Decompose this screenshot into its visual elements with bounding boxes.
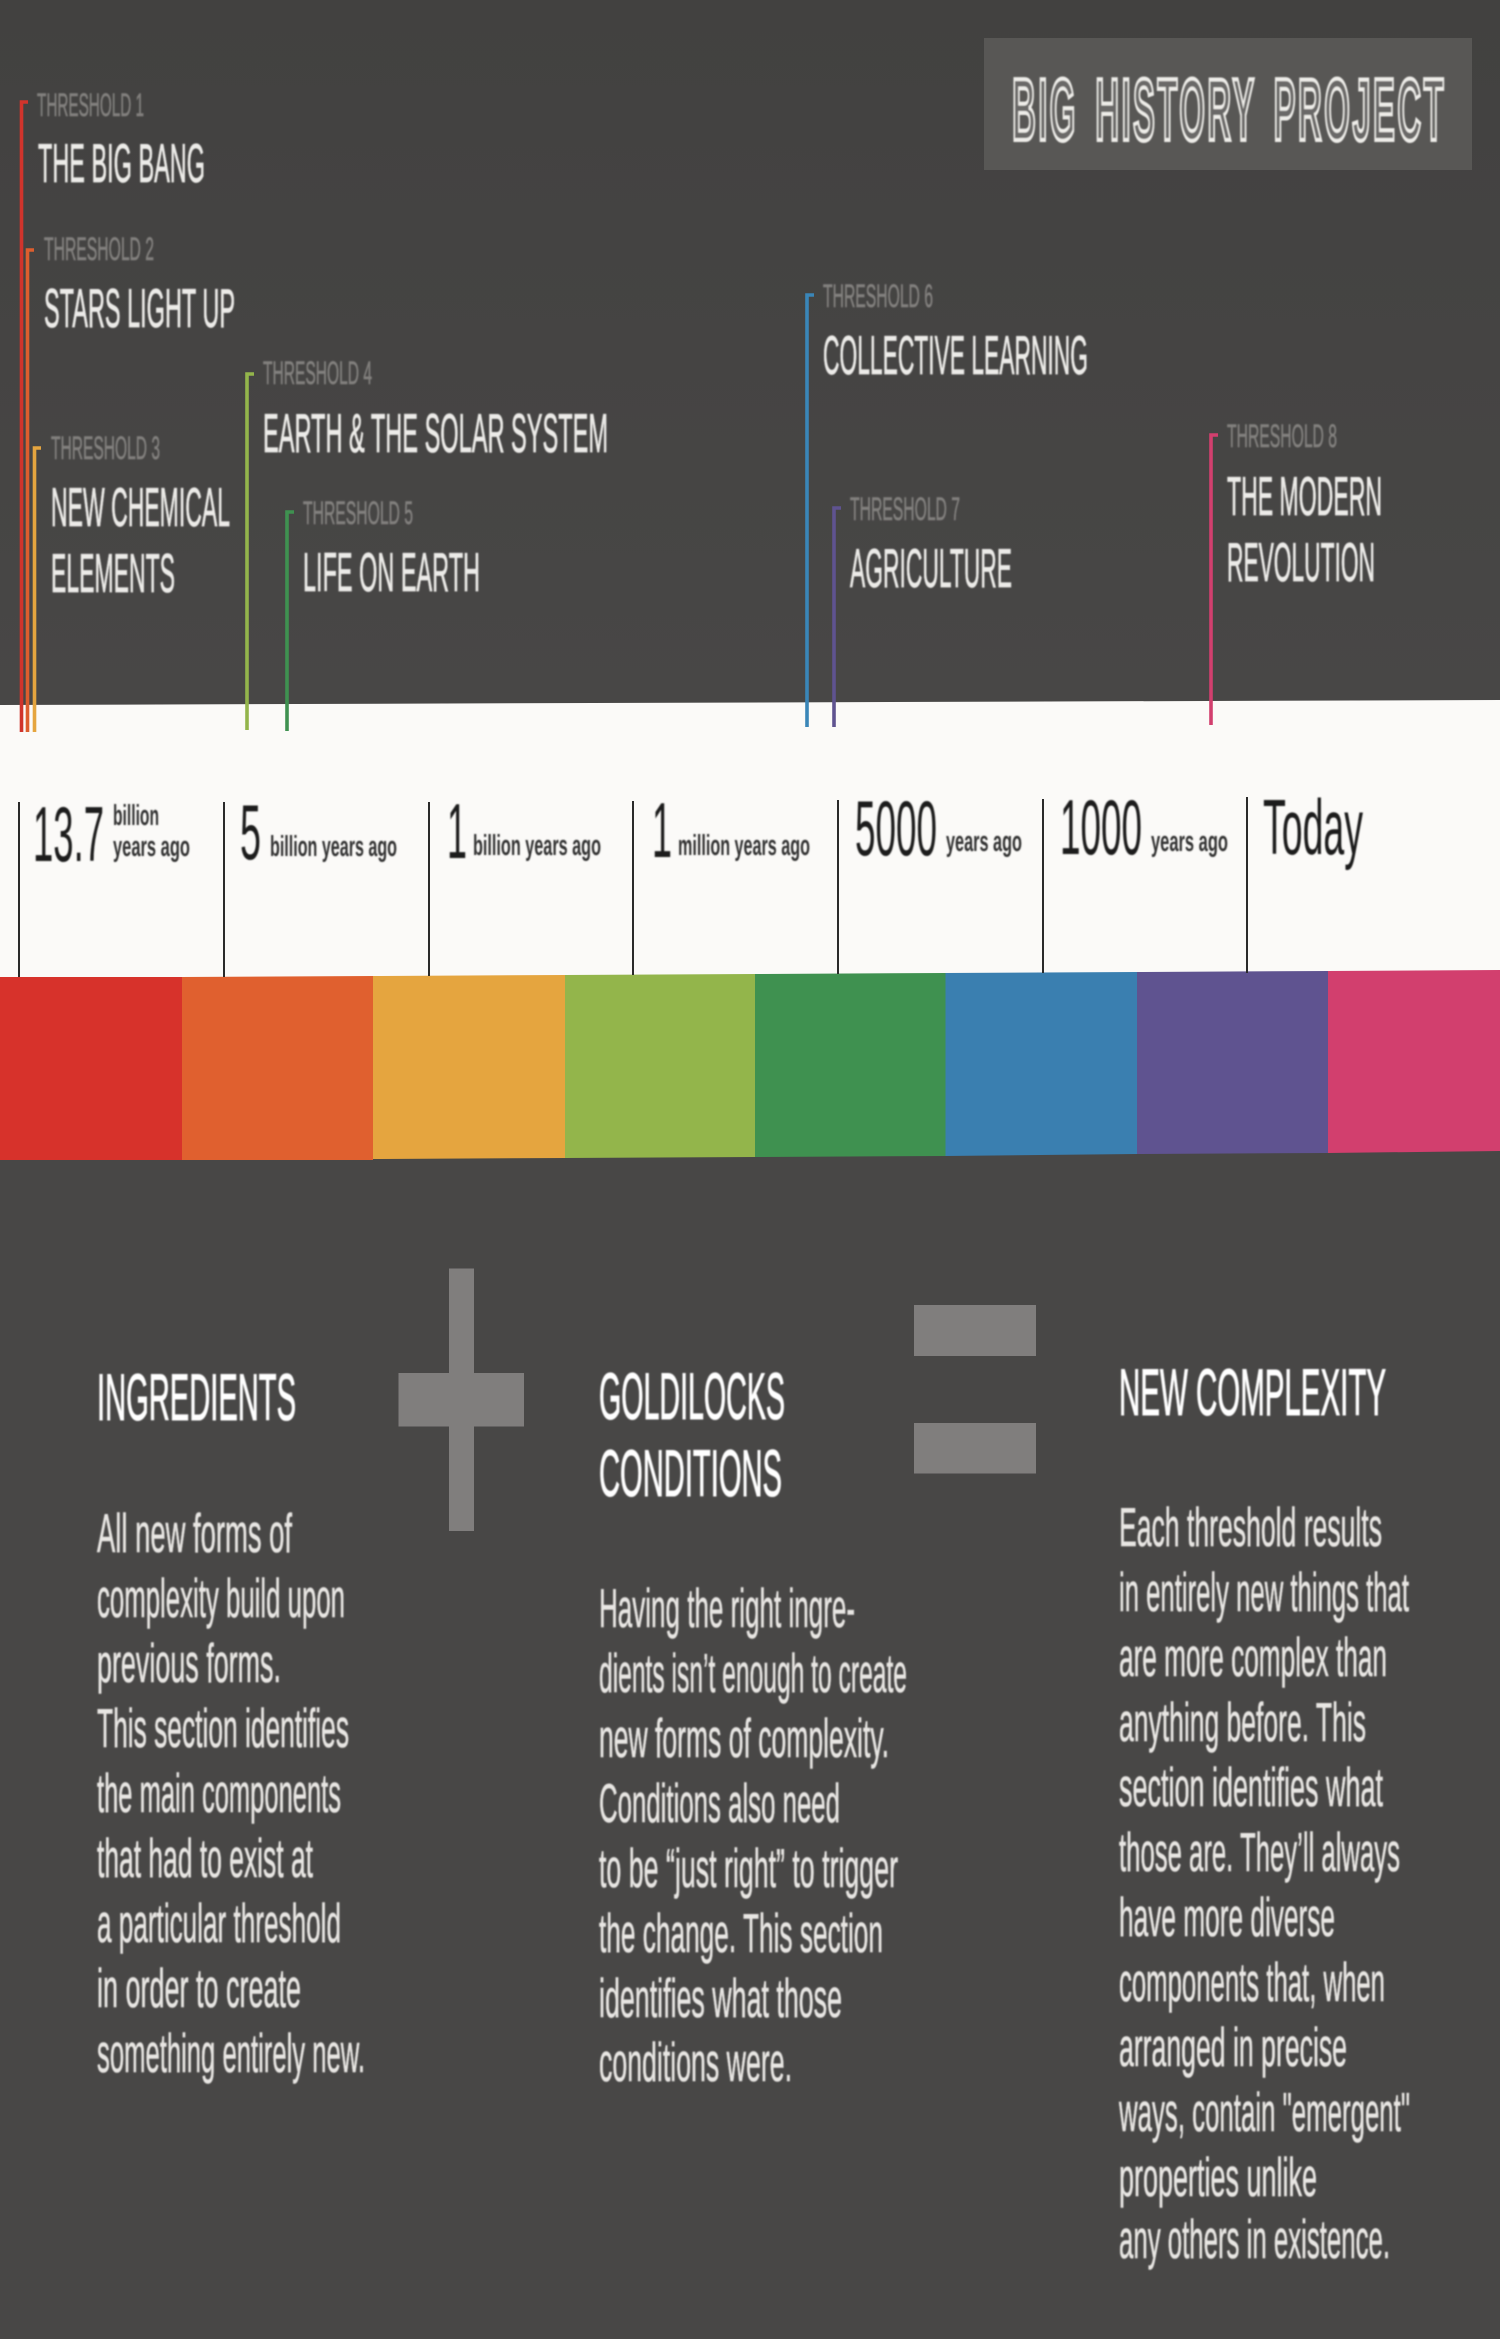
- column: goldilocks conditions: Conditions also need: [599, 1772, 840, 1834]
- column: ingredients: complexity build upon: [97, 1567, 345, 1629]
- threshold 6: THRESHOLD 6: [823, 278, 933, 314]
- text: Today: [1263, 783, 1363, 871]
- white timeline band: [0, 700, 1500, 979]
- time tick: 13.7 billion years ago: years ago: [113, 831, 190, 863]
- threshold 3: [34, 430, 230, 732]
- column: ingredients: [97, 1360, 365, 2084]
- time tick: 1000 years ago: years ago: [1151, 826, 1228, 858]
- time tick: 5000 years ago: 5000: [855, 784, 937, 872]
- threshold 7: THRESHOLD 7: [850, 491, 960, 527]
- time tick: 1 billion years ago: billion years ago: [473, 830, 601, 862]
- time tick: 1 billion years ago: 1: [447, 787, 467, 875]
- column: ingredients: All new forms of: [97, 1502, 292, 1564]
- text: COLLECTIVE LEARNING: [823, 324, 1088, 386]
- rainbow colour bar: [0, 970, 1500, 1160]
- text: THE BIG BANG: [38, 132, 205, 194]
- column: goldilocks conditions: [599, 1359, 907, 2093]
- icon: equals sign: [914, 1305, 1036, 1474]
- column: ingredients: the main components: [97, 1762, 341, 1824]
- column: goldilocks conditions: identifies what those: [599, 1967, 842, 2029]
- column: goldilocks conditions: new forms of complexity.: [599, 1707, 889, 1769]
- threshold 3: THRESHOLD 3: [51, 430, 160, 466]
- text: STARS LIGHT UP: [44, 277, 235, 339]
- time tick: 13.7 billion years ago: [18, 790, 190, 977]
- time tick: 1 million years ago: [632, 786, 810, 975]
- time tick: 1 billion years ago: [428, 787, 601, 976]
- time tick: 1000 years ago: 1000: [1060, 783, 1142, 871]
- threshold 7: [834, 491, 1012, 727]
- time tick: 13.7 billion years ago: 13.7: [33, 790, 104, 878]
- threshold 5: THRESHOLD 5: [303, 495, 413, 531]
- column: ingredients: previous forms.: [97, 1632, 281, 1694]
- time tick: 5 billion years ago: billion years ago: [270, 831, 397, 863]
- time tick: 1 million years ago: 1: [652, 786, 672, 874]
- column: goldilocks conditions: Having the right ingre-: [599, 1577, 855, 1639]
- column: goldilocks conditions: GOLDILOCKS: [599, 1359, 785, 1433]
- text: EARTH & THE SOLAR SYSTEM: [263, 402, 608, 464]
- icon: plus sign: [398, 1268, 524, 1531]
- threshold 2: [28, 231, 235, 732]
- threshold 8: THRESHOLD 8: [1227, 418, 1337, 454]
- column: goldilocks conditions: conditions were.: [599, 2031, 792, 2093]
- threshold 6: [807, 278, 1088, 727]
- time tick: 5 billion years ago: 5: [240, 788, 261, 876]
- column: ingredients: in order to create: [97, 1957, 301, 2019]
- time tick: 5000 years ago: years ago: [946, 826, 1022, 858]
- column: ingredients: a particular threshold: [97, 1892, 341, 1954]
- threshold 8: [1211, 418, 1382, 725]
- column: new complexity: [1119, 1355, 1410, 2270]
- column: ingredients: that had to exist at: [97, 1827, 313, 1889]
- text: something entirely new.: [97, 2022, 365, 2084]
- text: NEW CHEMICAL: [51, 476, 230, 538]
- threshold 1: THRESHOLD 1: [37, 87, 144, 123]
- time tick: 1 million years ago: million years ago: [678, 830, 810, 862]
- time tick: 1000 years ago: [1042, 783, 1228, 973]
- threshold 1: [22, 87, 205, 732]
- text: AGRICULTURE: [850, 537, 1012, 599]
- time tick: 13.7 billion years ago: billion: [113, 800, 159, 832]
- column: ingredients: INGREDIENTS: [97, 1360, 296, 1434]
- text: dients isn’t enough to create: [599, 1642, 907, 1704]
- threshold 4: [247, 355, 608, 730]
- threshold 2: THRESHOLD 2: [44, 231, 154, 267]
- column: goldilocks conditions: CONDITIONS: [599, 1436, 782, 1510]
- column: goldilocks conditions: the change. This section: [599, 1902, 883, 1964]
- column: ingredients: This section identifies: [97, 1697, 349, 1759]
- threshold 5: [287, 495, 480, 731]
- text: LIFE ON EARTH: [303, 541, 480, 603]
- threshold 3: ELEMENTS: [51, 542, 175, 604]
- column: goldilocks conditions: to be “just right” to trigger: [599, 1837, 898, 1899]
- time tick: 5 billion years ago: [223, 788, 397, 977]
- time tick: 5000 years ago: [837, 784, 1022, 974]
- threshold 4: THRESHOLD 4: [263, 355, 372, 391]
- logo box: Big History Project: [984, 38, 1472, 170]
